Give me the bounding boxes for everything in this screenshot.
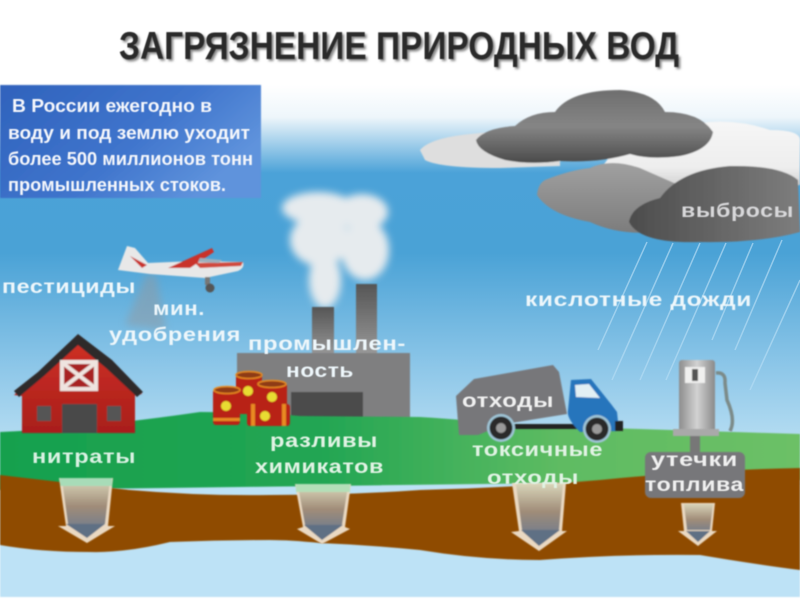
label: emissions: выбросы: [681, 201, 794, 222]
cloud: mid grey: [537, 163, 690, 233]
clouds: [420, 90, 800, 242]
chimney left: [312, 307, 334, 357]
info box: более 500 миллионов тонн: [8, 148, 253, 169]
truck chassis: [500, 424, 585, 429]
title: ЗАГРЯЗНЕНИЕ ПРИРОДНЫХ ВОД: [121, 27, 681, 70]
label: toxic waste: [472, 440, 603, 489]
label: chemical spills: [255, 431, 384, 478]
label: nitrates: нитраты: [32, 447, 136, 468]
groundwater: [0, 480, 800, 597]
cloud: white right: [598, 122, 800, 197]
info box: [0, 85, 261, 198]
cloud: dark top: [476, 90, 713, 163]
plane: [118, 246, 243, 292]
label: fuel leaks: [645, 450, 744, 496]
chimney right: [356, 284, 377, 356]
label: fertilizer: удобрения: [109, 325, 241, 346]
truck: [456, 365, 623, 443]
info box: воду и под землю уходит: [8, 122, 250, 143]
spray from plane: [125, 275, 166, 330]
info box: В России ежегодно в: [12, 95, 212, 116]
cloud: dark emissions: [629, 166, 800, 242]
barrels: [213, 372, 290, 426]
label: fertilizer: мин.: [153, 299, 205, 320]
acid rain lines: [598, 240, 800, 390]
label: toxic waste: токсичные: [472, 440, 603, 461]
arrow: toxic waste: [511, 483, 567, 551]
cloud: light left: [420, 125, 560, 168]
label: fuel leaks: топлива: [645, 475, 744, 496]
label: industry: [248, 334, 406, 382]
barn: [14, 334, 143, 433]
fuel pump: [645, 360, 745, 498]
arrow: nitrates: [58, 478, 115, 543]
labels: [2, 201, 794, 496]
barn loft window: [60, 360, 98, 391]
ground: green: [0, 412, 800, 490]
label: pesticides: пестициды: [2, 277, 136, 298]
label: chemical spills: химикатов: [255, 457, 384, 478]
label: acid rain: кислотные дожди: [525, 290, 752, 311]
label: waste: отходы: [462, 391, 554, 412]
factory body: [237, 353, 410, 423]
barn door: [62, 404, 97, 433]
info box: промышленных стоков.: [8, 174, 226, 195]
smoke: [282, 192, 389, 308]
ground: soil: [0, 468, 800, 570]
label: industry: ность: [286, 361, 354, 382]
factory: [237, 284, 410, 423]
title: ЗАГРЯЗНЕНИЕ ПРИРОДНЫХ ВОД: [119, 25, 679, 68]
arrow: chemicals: [295, 484, 351, 544]
label: fuel leaks: утечки: [651, 450, 738, 471]
truck cargo: [456, 365, 567, 435]
label: chemical spills: разливы: [270, 431, 378, 452]
label: toxic waste: отходы: [487, 468, 579, 489]
sky background: [0, 85, 800, 485]
label: fertilizer: [109, 299, 241, 346]
fuel leak label plate: [645, 452, 745, 498]
truck cab: [568, 379, 619, 432]
label: industry: промышлен-: [248, 334, 406, 355]
arrow: fuel leak: [678, 503, 717, 546]
